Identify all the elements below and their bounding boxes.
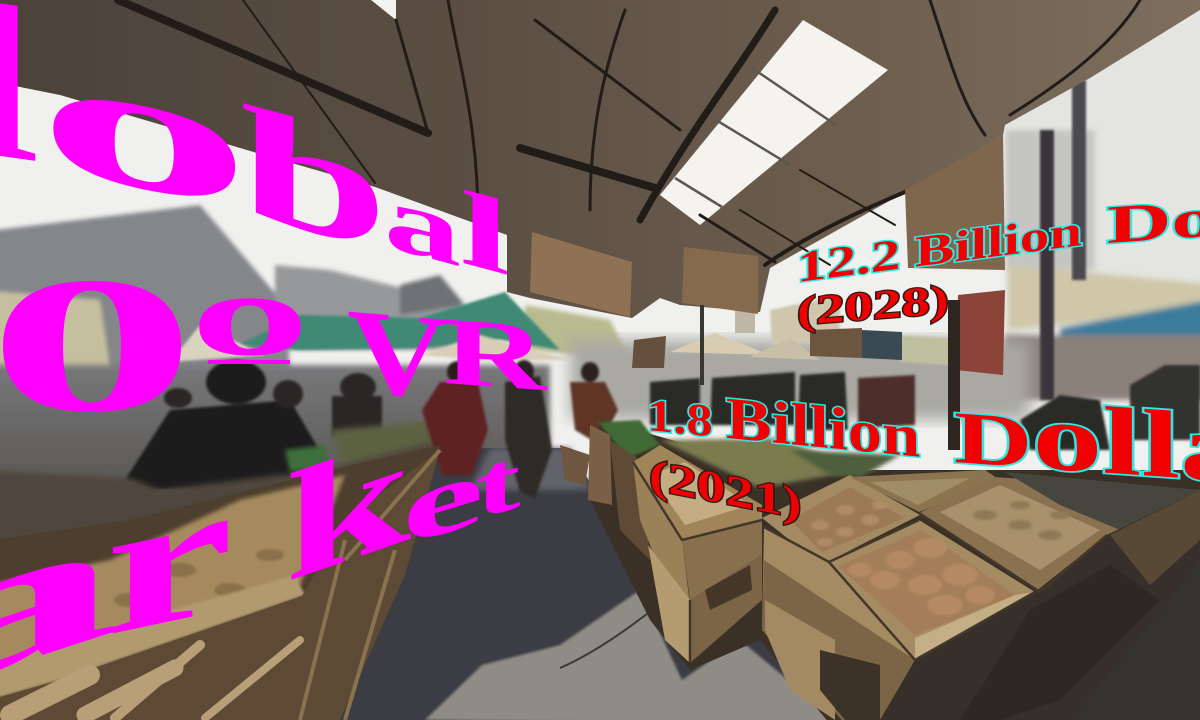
year 2021: (2021) (649, 451, 801, 529)
crate front panel (762, 560, 915, 720)
title line: Market: e (402, 433, 484, 568)
title line: Market (0, 401, 520, 720)
ceiling: continuous awning (0, 0, 1200, 318)
left crowd (125, 360, 325, 490)
sky gap in awning (371, 0, 396, 20)
title line: 360º VR: V (347, 284, 448, 425)
title line: Market: t (476, 430, 520, 537)
year 2028: (2028) (797, 277, 949, 334)
far umbrellas (670, 333, 770, 355)
figure red (447, 361, 469, 383)
road crack (560, 610, 652, 668)
ceiling beams and cables (118, 0, 1140, 265)
figure centre (514, 360, 534, 384)
title line: Market: k (285, 401, 411, 616)
left crate potatoes (0, 475, 345, 670)
potatoes: medium crate (811, 501, 888, 546)
far crowd band left (0, 365, 550, 555)
title line: Global: b (240, 71, 388, 286)
title line: Global: o (37, 11, 252, 248)
title line: 360º VR: º (189, 255, 311, 473)
value 2021 (647, 376, 1200, 512)
right crowd (650, 365, 1200, 450)
title line: 360º VR (0, 237, 548, 473)
left foreground stalls (0, 445, 440, 720)
right side distant stalls (1005, 10, 1200, 400)
crate: medium potatoes (762, 475, 920, 565)
crate: top right 1 (850, 470, 1000, 512)
greens (598, 420, 660, 458)
silhouette: vendor left (125, 360, 325, 490)
left greens (285, 445, 330, 472)
title line: Global (0, 0, 510, 298)
figure right (581, 362, 599, 382)
logs front left (10, 640, 300, 718)
title line: Global: l (460, 168, 510, 298)
title line: Global: a (384, 162, 461, 288)
road sunlit patch (425, 590, 870, 720)
road (330, 448, 900, 720)
dark lower right stall (880, 490, 1200, 720)
right foreground stalls: base (590, 420, 1200, 720)
left buildings (0, 205, 630, 370)
crate: big potatoes (762, 520, 1035, 720)
skylight (660, 20, 888, 225)
callout: 1.8 Billion Dollars (2021) (647, 376, 1200, 529)
green canopy (238, 292, 560, 350)
support posts (948, 300, 960, 450)
mid distance haze (570, 340, 1030, 420)
left blurred ground (0, 440, 440, 590)
left crate front rail (0, 575, 305, 700)
crate: small potatoes (633, 445, 762, 540)
value 2021: 1.8 Billion (647, 376, 920, 470)
value 2028 (797, 175, 1200, 292)
title: Global 360º VR Market (warped magenta text) (0, 0, 548, 720)
hanging signs (530, 232, 632, 317)
ordinal underline (208, 360, 290, 364)
potatoes: big crate (848, 538, 995, 615)
walking figures (422, 360, 618, 498)
small back crates (560, 445, 590, 485)
crate slats (633, 462, 1107, 663)
value 2028: 12.2 Billion (797, 206, 1082, 292)
crate: right long (919, 477, 1200, 592)
callout: 12.2 Billion Dollars (2028) (797, 175, 1200, 334)
title line: Market: r (105, 441, 234, 676)
title line: 360º VR: R (443, 297, 548, 412)
